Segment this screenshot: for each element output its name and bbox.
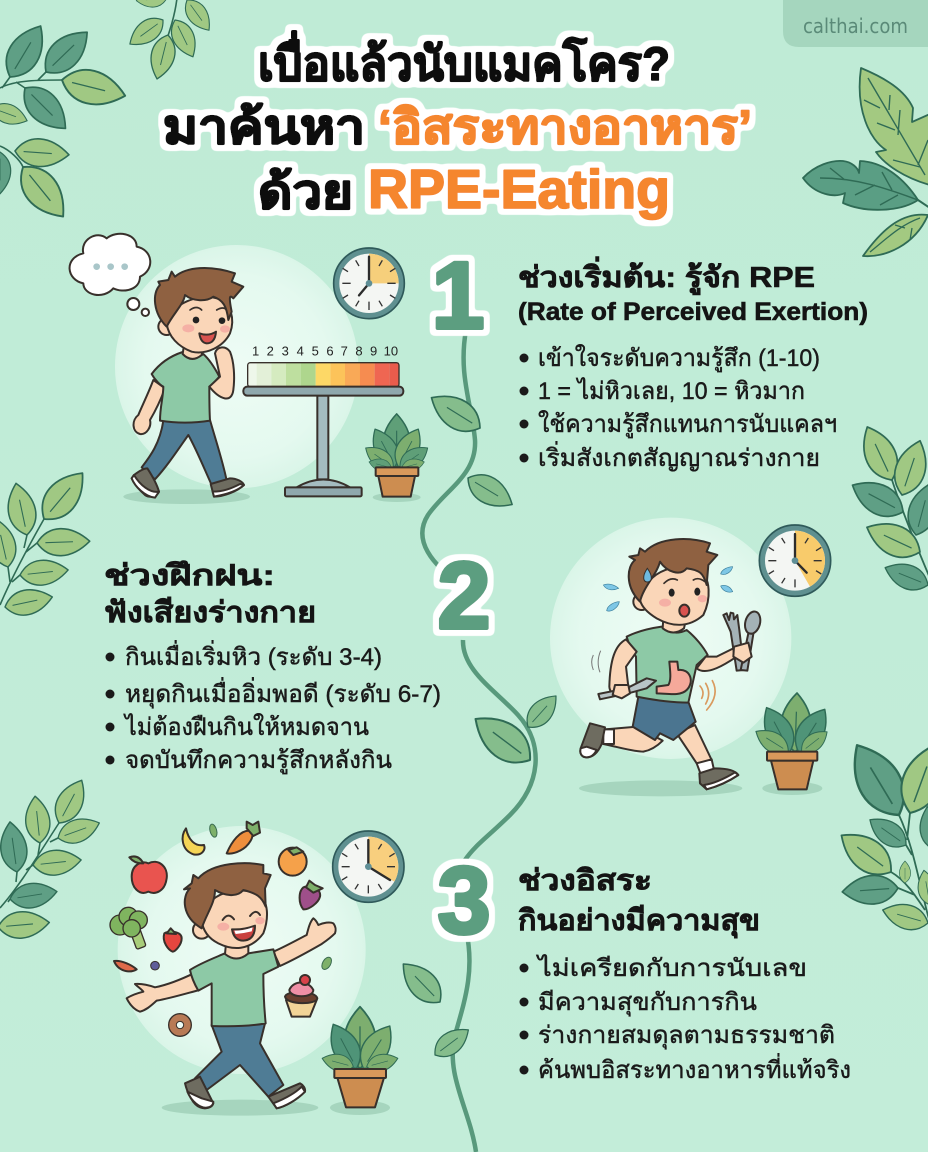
- decorative leaves: left lower: [0, 774, 103, 940]
- hunger scale 1-10: 10: [384, 343, 398, 358]
- hunger scale 1-10: 2: [267, 343, 274, 358]
- website tag: [783, 0, 928, 47]
- icon: clock: [334, 248, 404, 319]
- step 3 text block: ไม่เครียดกับการนับเลข: [536, 954, 807, 982]
- foods: [110, 822, 333, 1036]
- step 1 text block: ช่วงเริ่มต้น: รู้จัก RPE: [518, 256, 815, 295]
- icon: clock: [333, 831, 404, 902]
- hunger scale 1-10: 3: [282, 343, 289, 358]
- website tag: calthai.com: [803, 14, 908, 38]
- icon: thought bubble: [70, 234, 150, 316]
- step 1 number: 1: [432, 243, 484, 349]
- illustration: step 2 running boy: [550, 518, 836, 796]
- hunger scale 1-10: 9: [370, 343, 377, 358]
- fork and spoon: [723, 610, 763, 671]
- step 3 text block: ร่างกายสมดุลตามธรรมชาติ: [538, 1022, 835, 1050]
- icon: potted plant: [751, 693, 836, 789]
- illustration: step 3 happy boy with foods: [110, 822, 404, 1116]
- decorative leaves: top: [124, 0, 217, 82]
- vine connecting steps: [394, 330, 564, 1152]
- title: มาค้นหา: [163, 100, 365, 153]
- step 2 text block: [104, 560, 441, 775]
- stomach: [657, 662, 715, 710]
- vine leaves: [394, 385, 564, 1064]
- step 1 text block: (Rate of Perceived Exertion): [518, 298, 868, 326]
- step 3 number: 3: [438, 848, 490, 954]
- step 2 text block: ฟังเสียงร่างกาย: [104, 597, 316, 629]
- step 3 text block: กินอย่างมีความสุข: [518, 905, 760, 938]
- step 3 text block: [518, 865, 851, 1084]
- hunger scale 1-10: 7: [341, 343, 348, 358]
- icon: potted plant: [361, 414, 433, 497]
- sweat drops: [603, 567, 733, 611]
- step 2 text block: จดบันทึกความรู้สึกหลังกิน: [125, 747, 392, 775]
- decorative leaves: top right: [803, 68, 928, 256]
- step 1 text block: 1 = ไม่หิวเลย, 10 = หิวมาก: [538, 377, 805, 405]
- title: [163, 30, 752, 220]
- hunger scale stand: [243, 343, 403, 496]
- decorative leaves: top left: [0, 18, 129, 227]
- icon: clock: [759, 525, 831, 596]
- step 2 number: 2: [438, 543, 490, 649]
- decorative leaves: right lower: [832, 735, 928, 935]
- hunger scale 1-10: [248, 343, 399, 387]
- title: ‘อิสระทางอาหาร’: [378, 100, 752, 153]
- hunger scale 1-10: 4: [297, 343, 304, 358]
- title: RPE-Eating: [368, 158, 670, 220]
- step 1 text block: เข้าใจระดับความรู้สึก (1-10): [538, 344, 820, 373]
- boy walking and thinking: [132, 268, 244, 498]
- hunger scale 1-10: 5: [312, 343, 319, 358]
- step 3 text block: มีความสุขกับการกิน: [538, 989, 757, 1017]
- decorative leaves: left middle: [0, 463, 94, 619]
- step 2 text block: กินเมื่อเริ่มหิว (ระดับ 3-4): [125, 640, 382, 671]
- hunger scale 1-10: 8: [355, 343, 363, 358]
- step 3 text block: ค้นพบอิสระทางอาหารที่แท้จริง: [538, 1053, 851, 1084]
- step 1 text block: เริ่มสังเกตสัญญาณร่างกาย: [538, 441, 820, 472]
- decorative leaves: right middle: [846, 421, 928, 596]
- running boy: [580, 539, 763, 789]
- step 1 text block: ใช้ความรู้สึกแทนการนับแคลฯ: [538, 410, 837, 439]
- step 2 text block: ไม่ต้องฝืนกินให้หมดจาน: [123, 713, 369, 741]
- hunger scale 1-10: 6: [326, 343, 334, 358]
- happy boy: [127, 863, 336, 1108]
- illustration: step 1 boy with hunger scale: [70, 234, 433, 504]
- step 3 text block: ช่วงอิสระ: [518, 865, 652, 897]
- step 2 text block: ช่วงฝึกฝน:: [104, 560, 275, 592]
- hunger scale 1-10: 1: [252, 343, 259, 358]
- step 2 text block: หยุดกินเมื่ออิ่มพอดี (ระดับ 6-7): [125, 677, 441, 709]
- step 1 text block: [518, 256, 868, 472]
- title: ด้วย: [258, 165, 353, 218]
- title: เบื่อแล้วนับแมคโคร?: [258, 30, 670, 90]
- icon: potted plant: [320, 1007, 401, 1107]
